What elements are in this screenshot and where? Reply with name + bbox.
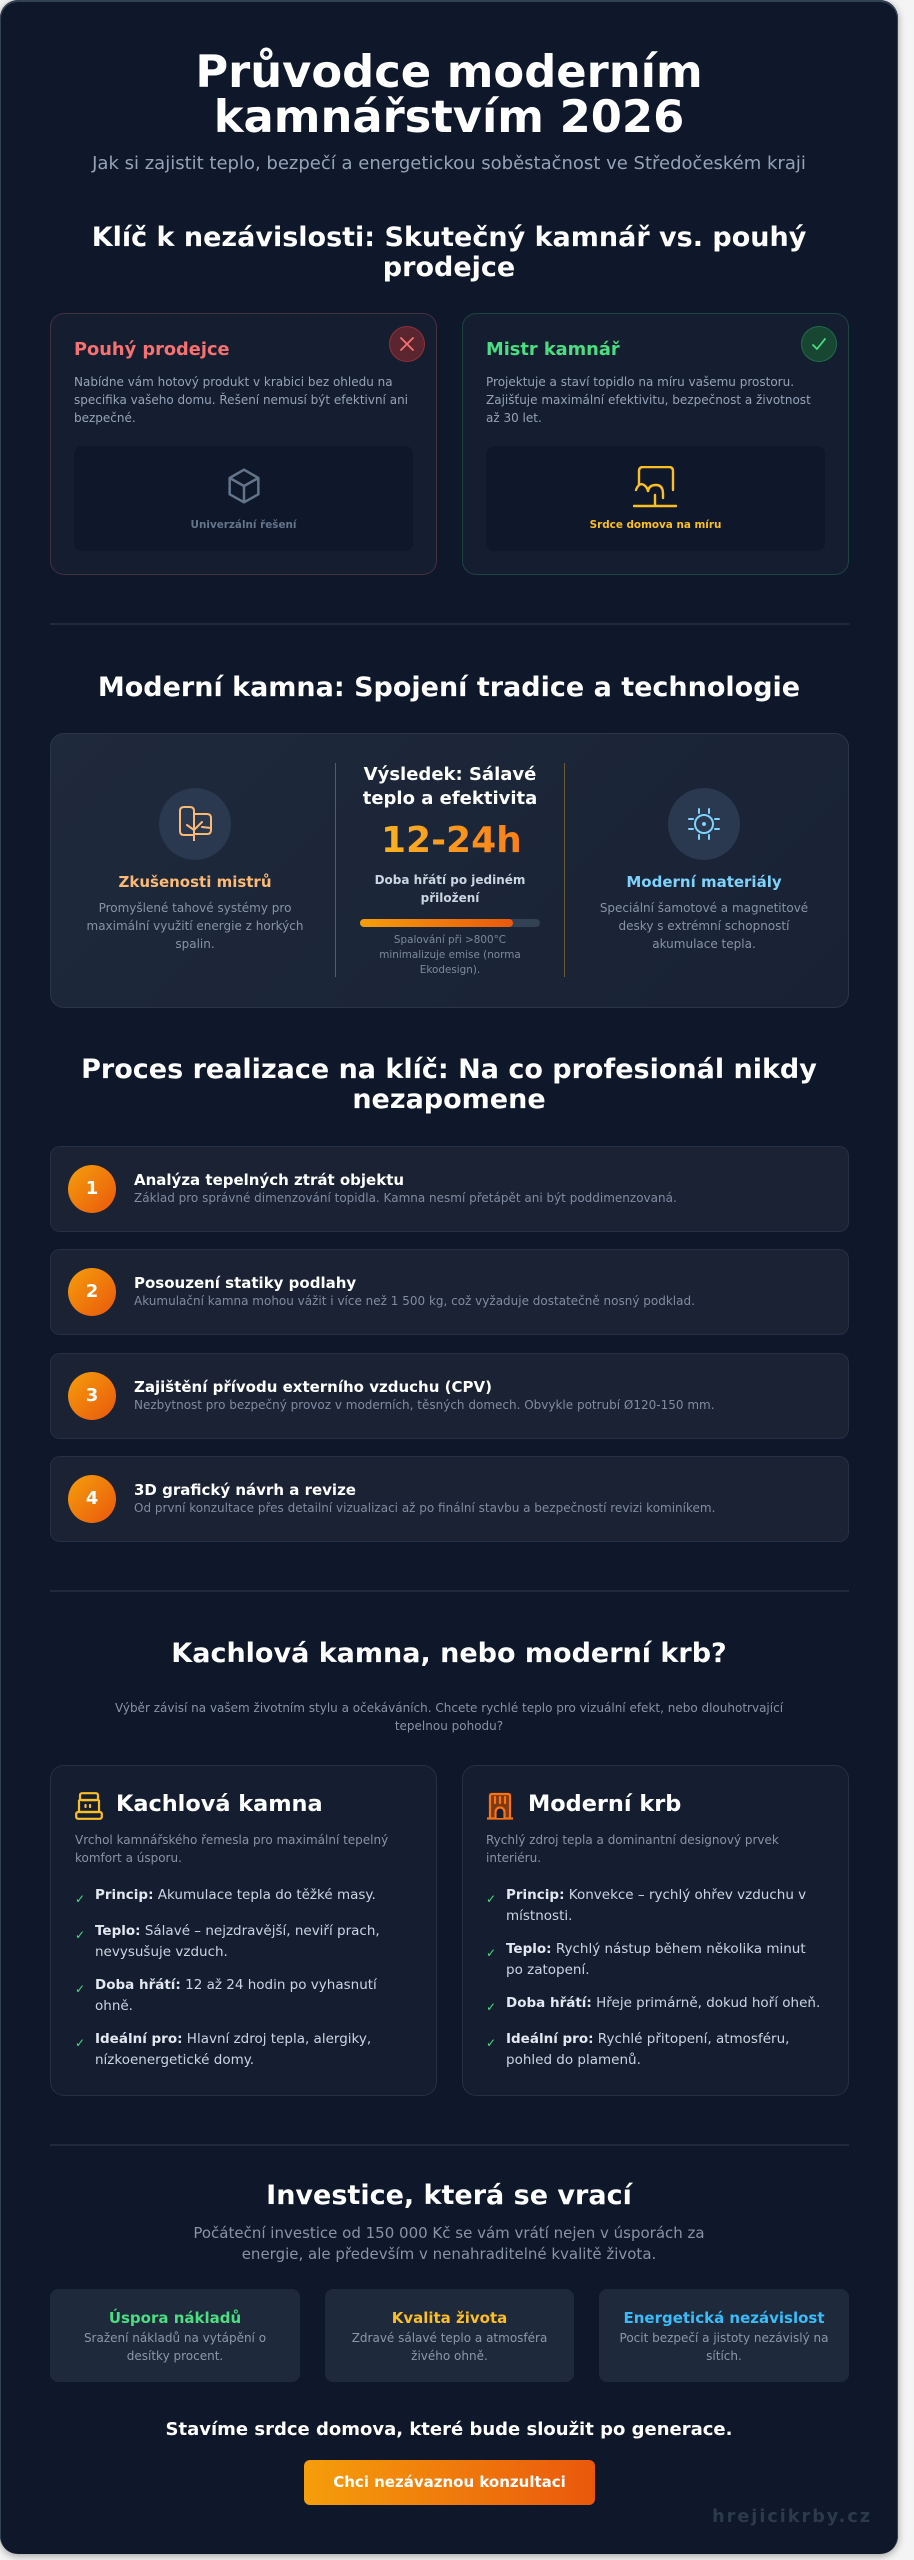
tiled stove heading: Kachlová kamna [116, 1791, 323, 1817]
title [195, 45, 703, 143]
comparison intro [115, 1701, 784, 1733]
call to action button: Chci nezávaznou konzultaci [333, 2473, 566, 2491]
materials text [600, 901, 808, 951]
benefit text [352, 2331, 547, 2363]
seller description [74, 375, 408, 425]
list item: heating time: ✓ [75, 1982, 85, 1996]
list item: principle [486, 1887, 806, 1924]
subtitle: Jak si zajistit teplo, bezpečí a energetickou soběstačnost ve Středočeském kraji [92, 153, 806, 174]
divider [50, 623, 849, 625]
step text: Od první konzultace přes detailní vizualizaci až po finální stavbu a bezpečností revizi kominíkem. [134, 1501, 715, 1515]
list item: principle: ✓ [486, 1892, 496, 1906]
list item: ideal for: ✓ [75, 2036, 85, 2050]
panel: modern fireplace [462, 1765, 849, 2096]
stat: 12-24h [345, 821, 555, 861]
investment text [193, 2224, 705, 2263]
list item: principle: ✓ [75, 1892, 85, 1906]
combustion note: Ekodesign). [420, 964, 480, 976]
benefit title: Úspora nákladů [109, 2309, 241, 2327]
list item: heat [486, 1941, 806, 1978]
list item: ideal for: Ideální pro: Hlavní zdroj tepla, alergiky, [95, 2031, 371, 2047]
seller heading: Pouhý prodejce [74, 339, 230, 360]
label: universal solution: Univerzální řešení [191, 519, 296, 531]
step title: Zajištění přívodu externího vzduchu (CPV) [134, 1378, 492, 1396]
benefit title: Energetická nezávislost [623, 2309, 825, 2327]
master description: Zajišťuje maximální efektivitu, bezpečnost a životnost [486, 393, 811, 407]
step number [68, 1268, 116, 1316]
combustion note: Spalování při >800°C [394, 934, 506, 946]
list item: heat: ✓ [75, 1928, 85, 1942]
benefit: quality of life [325, 2289, 574, 2382]
master illustration box [486, 446, 825, 551]
experience text: Promyšlené tahové systémy pro [99, 901, 291, 915]
result heading: teplo a efektivita [363, 788, 537, 809]
list item: heating time [75, 1977, 377, 2014]
seller description: specifika vašeho domu. Řešení nemusí být efektivní ani [74, 393, 408, 407]
icon: masters experience [159, 788, 231, 860]
list item: ideal for [486, 2031, 789, 2068]
heading: investment: Investice, která se vrací [266, 2180, 632, 2211]
investment text: energie, ale především v nenahraditelné kvalitě života. [242, 2245, 656, 2263]
list item: principle: Princip: Konvekce – rychlý ohřev vzduchu v [506, 1887, 806, 1903]
title: kamnářstvím 2026 [214, 90, 684, 143]
seller description: Nabídne vám hotový produkt v krabici bez ohledu na [74, 375, 393, 389]
label: heart of home: Srdce domova na míru [590, 519, 721, 531]
comparison intro: tepelnou pohodu? [395, 1719, 503, 1733]
step number [68, 1372, 116, 1420]
divider [50, 2144, 849, 2146]
step title: Posouzení statiky podlahy [134, 1274, 356, 1292]
step number: 4 [86, 1488, 98, 1509]
combustion note [379, 934, 521, 976]
step number [68, 1165, 116, 1213]
icon: modern fireplace [487, 1792, 513, 1820]
benefit text: desítky procent. [127, 2349, 223, 2363]
benefit title: Kvalita života [392, 2309, 507, 2327]
stat caption [375, 873, 525, 905]
step 2 [50, 1249, 849, 1335]
step 1 [50, 1146, 849, 1232]
step text: Nezbytnost pro bezpečný provoz v moderních, těsných domech. Obvykle potrubí Ø120-150 mm. [134, 1398, 715, 1412]
comparison intro: Výběr závisí na vašem životním stylu a očekáváních. Chcete rychlé teplo pro vizuální efekt, nebo dlouhotrvající [115, 1701, 783, 1715]
seller illustration box [74, 446, 413, 551]
master description: až 30 let. [486, 411, 542, 425]
list item: heat: Teplo: Sálavé – nejzdravější, neviří prach, [95, 1923, 380, 1939]
list item: heat: po zatopení. [506, 1962, 590, 1978]
heading: craftsman vs seller [92, 222, 806, 283]
list item: heat: nevysušuje vzduch. [95, 1944, 228, 1960]
panel: tradition and technology [50, 733, 849, 1008]
stat caption: Doba hřátí po jediném [375, 873, 525, 887]
divider [50, 1590, 849, 1592]
heading: craftsman vs seller: Klíč k nezávislosti: Skutečný kamnář vs. pouhý [92, 222, 806, 253]
panel: master [462, 313, 849, 575]
badge: check [801, 326, 837, 362]
step title: 3D grafický návrh a revize [134, 1481, 356, 1499]
materials text: akumulace tepla. [652, 937, 756, 951]
progress bar [360, 919, 540, 927]
column: experience [87, 788, 303, 951]
list item: heat: Teplo: Rychlý nástup během několika minut [506, 1941, 806, 1957]
benefit text: Pocit bezpečí a jistoty nezávislý na [620, 2331, 828, 2345]
column: materials [600, 788, 808, 951]
master description: Projektuje a staví topidlo na míru vašemu prostoru. [486, 375, 794, 389]
list item: heating time: ✓ [486, 2000, 496, 2014]
heading: modern stoves: Moderní kamna: Spojení tradice a technologie [98, 672, 800, 703]
column: result [360, 764, 540, 976]
list item: ideal for: pohled do plamenů. [506, 2052, 641, 2068]
investment text: Počáteční investice od 150 000 Kč se vám vrátí nejen v úsporách za [193, 2224, 705, 2242]
stat caption: přiložení [421, 891, 479, 905]
icon: box [228, 468, 260, 504]
panel: tiled stove [50, 1765, 437, 2096]
seller description: bezpečné. [74, 411, 136, 425]
benefit text: sítích. [706, 2349, 742, 2363]
fireplace description: Rychlý zdroj tepla a dominantní designový prvek [486, 1833, 779, 1847]
list item: ideal for: Ideální pro: Rychlé přitopení, atmosféru, [506, 2031, 789, 2047]
closing statement: Stavíme srdce domova, které bude sloužit po generace. [166, 2419, 732, 2440]
materials text: desky s extrémní schopností [619, 919, 789, 933]
benefit text [620, 2331, 828, 2363]
heading: stove or fireplace: Kachlová kamna, nebo moderní krb? [171, 1638, 727, 1669]
icon: custom stove [633, 466, 677, 508]
list item: ideal for: ✓ [486, 2036, 496, 2050]
icon: materials gear [668, 788, 740, 860]
tiled stove description [75, 1833, 388, 1865]
step number [68, 1475, 116, 1523]
fireplace heading: Moderní krb [528, 1791, 681, 1817]
fireplace description [486, 1833, 779, 1865]
benefit text [84, 2331, 266, 2363]
fireplace description: interiéru. [486, 1851, 541, 1865]
step title: Analýza tepelných ztrát objektu [134, 1171, 404, 1189]
list item: heating time: ohně. [95, 1998, 133, 2014]
list item: principle: místnosti. [506, 1908, 572, 1924]
stat: 12-24h: 12-24h [381, 820, 522, 861]
result heading [362, 764, 537, 809]
experience heading: Zkušenosti mistrů [118, 873, 272, 891]
benefit text: Sražení nákladů na vytápění o [84, 2331, 266, 2345]
benefit: energy independence [599, 2289, 849, 2382]
heading: craftsman vs seller: prodejce [383, 252, 515, 283]
step text: Základ pro správné dimenzování topidla. Kamna nesmí přetápět ani být poddimenzovaná. [134, 1191, 677, 1205]
icon: tiled stove [75, 1792, 103, 1820]
materials text: Speciální šamotové a magnetitové [600, 901, 808, 915]
benefit: cost saving [50, 2289, 300, 2382]
experience text [87, 901, 303, 951]
master heading: Mistr kamnář [486, 339, 620, 360]
divider left [335, 763, 336, 977]
experience text: spalin. [175, 937, 215, 951]
experience text: maximální využití energie z horkých [87, 919, 303, 933]
list item: heating time: Doba hřátí: 12 až 24 hodin po vyhasnutí [95, 1977, 377, 1993]
step text: Akumulační kamna mohou vážit i více než 1 500 kg, což vyžaduje dostatečně nosný podklad. [134, 1294, 695, 1308]
step number: 1 [86, 1178, 98, 1199]
master description [486, 375, 811, 425]
list item: ideal for [75, 2031, 371, 2068]
divider right [564, 763, 565, 977]
list item: heat [75, 1923, 380, 1960]
step number: 2 [86, 1281, 98, 1302]
list item: heat: ✓ [486, 1946, 496, 1960]
call to action button [304, 2460, 595, 2505]
combustion note: minimalizuje emise (norma [379, 949, 521, 961]
step 4 [50, 1456, 849, 1542]
tiled stove description: komfort a úsporu. [75, 1851, 182, 1865]
step 3 [50, 1353, 849, 1439]
badge: cross [389, 326, 425, 362]
materials heading: Moderní materiály [626, 873, 782, 891]
heading: process: Proces realizace na klíč: Na co profesionál nikdy [81, 1054, 817, 1085]
watermark: hrejicikrby.cz [712, 2507, 872, 2527]
benefit text: živého ohně. [411, 2349, 488, 2363]
list item: principle: Princip: Akumulace tepla do těžké masy. [95, 1887, 376, 1903]
list item: heating time: Doba hřátí: Hřeje primárně, dokud hoří oheň. [506, 1995, 820, 2011]
benefit text: Zdravé sálavé teplo a atmosféra [352, 2331, 547, 2345]
heading: process: nezapomene [352, 1084, 546, 1115]
title: Průvodce moderním [195, 45, 703, 98]
tiled stove description: Vrchol kamnářského řemesla pro maximální tepelný [75, 1833, 388, 1847]
step number: 3 [86, 1385, 98, 1406]
result heading: Výsledek: Sálavé [364, 764, 536, 785]
heading: process [81, 1054, 817, 1115]
list item: ideal for: nízkoenergetické domy. [95, 2052, 254, 2068]
panel: seller [50, 313, 437, 575]
